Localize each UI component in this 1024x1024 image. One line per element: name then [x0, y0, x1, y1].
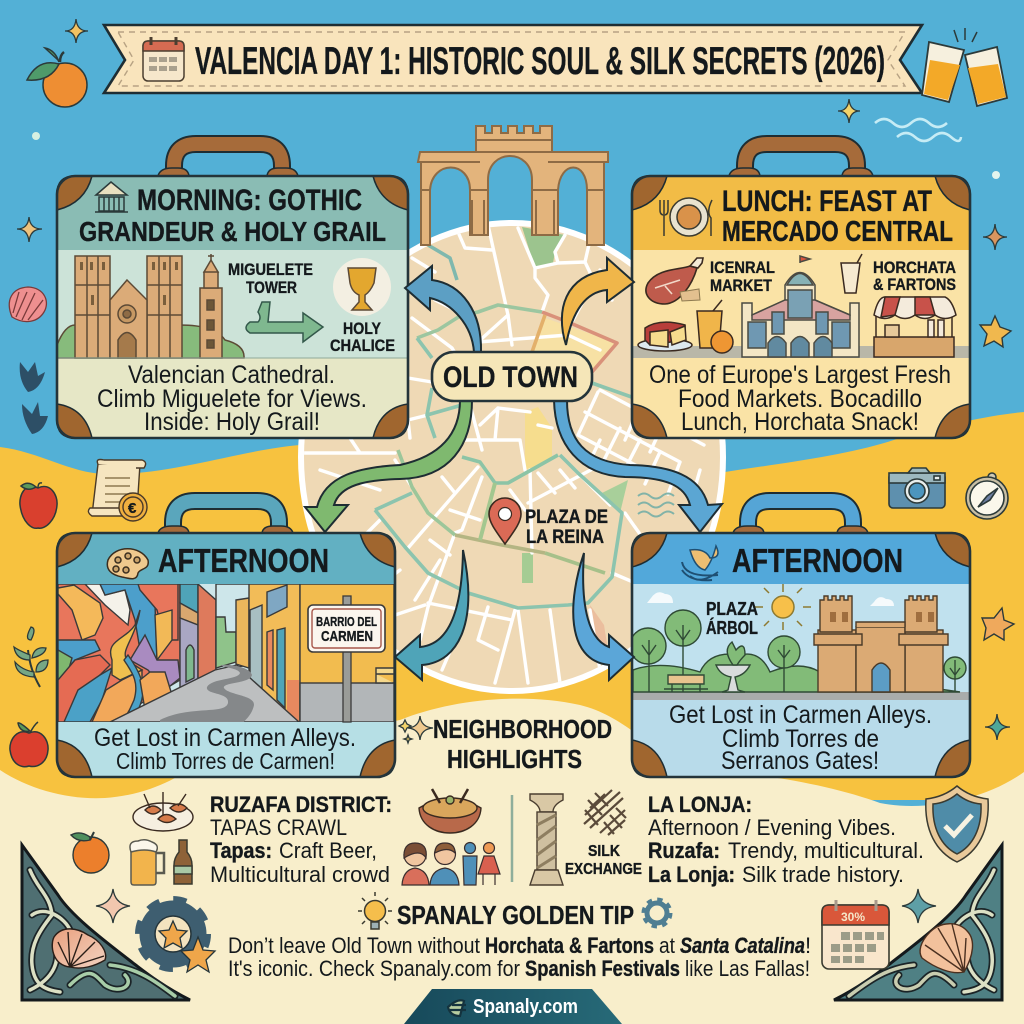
- suitcase: morning: Inside: Holy Grail!: [144, 408, 320, 436]
- arrow: to afternoon serranos: [554, 400, 722, 532]
- footer text: Spanaly.com: [473, 996, 578, 1018]
- icon: star right upper: [980, 316, 1011, 347]
- la lonja block: [530, 790, 924, 887]
- label: plaza de la reina: PLAZA DE: [525, 507, 608, 528]
- corners: [57, 176, 408, 438]
- road sign: barrio del carmen: [308, 596, 385, 722]
- heading: morning: MORNING: GOTHIC: [137, 184, 362, 217]
- arrow: to morning: [405, 266, 481, 352]
- old town pill: OLD TOWN: [443, 361, 578, 394]
- ruzafa block: Tapas:: [210, 838, 272, 863]
- background: sand band: [0, 412, 1024, 800]
- corners: [632, 533, 970, 777]
- neighborhood highlights heading: HIGHLIGHTS: [447, 744, 582, 774]
- label: holy chalice: HOLY: [343, 319, 382, 338]
- ruzafa block: [130, 789, 500, 887]
- suitcase: afternoon carmen: [57, 501, 395, 777]
- suitcase: afternoon serranos: Climb Torres de: [722, 725, 879, 753]
- corners: [632, 176, 970, 438]
- icon: holy chalice: [333, 258, 391, 316]
- icon: gear with star: [139, 900, 215, 972]
- suitcase: afternoon serranos: Serranos Gates!: [721, 747, 879, 775]
- ruzafa block: TAPAS CRAWL: [210, 815, 347, 840]
- la lonja block: Silk trade history.: [742, 862, 904, 887]
- icon: waves: [875, 119, 961, 141]
- icon: stew bowl: [419, 789, 481, 833]
- footer badge: [404, 989, 622, 1024]
- tip text line 2: like Las Fallas!: [685, 956, 810, 981]
- icon: scroll and euro coin: [88, 460, 147, 521]
- arrow: curved to serranos side: [573, 553, 634, 680]
- icon: beer bottle: [174, 840, 192, 884]
- road sign: barrio del carmen: BARRIO DEL: [316, 615, 377, 629]
- suitcase: afternoon serranos: ÁRBOL: [706, 617, 758, 638]
- suitcase: morning: CHALICE: [330, 336, 395, 355]
- icon: calendar: [143, 37, 184, 81]
- map of old town: [295, 220, 726, 694]
- title banner: [104, 25, 922, 93]
- icon: silk weave: [584, 790, 626, 835]
- label: horchata and fartons: HORCHATA: [873, 258, 956, 277]
- icon: scallop shell left: [9, 287, 46, 322]
- arrow: to lunch: [562, 258, 634, 345]
- shell: [920, 924, 973, 973]
- tip text line 2: Spanish Festivals: [525, 956, 680, 981]
- divider: [511, 795, 513, 882]
- illustration: market stall: [874, 297, 956, 357]
- suitcase: afternoon serranos: [630, 501, 970, 777]
- suitcase: lunch: & FARTONS: [873, 275, 956, 294]
- icon: sun: [755, 584, 811, 630]
- text: ruzafa: RUZAFA DISTRICT:: [210, 792, 392, 817]
- illustration: juice and orange: [697, 300, 733, 353]
- label: miguelete tower: MIGUELETE: [228, 260, 313, 279]
- label: plaza de la reina: LA REINA: [526, 527, 604, 548]
- illustration: cathedral: [57, 254, 244, 358]
- suitcase: morning: Climb Miguelete for Views.: [97, 385, 367, 413]
- body text: afternoon serranos: Get Lost in Carmen Alleys.: [669, 701, 932, 729]
- icon: orange lower: [71, 832, 109, 873]
- heading: afternoon serranos: AFTERNOON: [732, 542, 903, 579]
- icon: compass: [966, 473, 1008, 519]
- neighborhood highlights heading: NEIGHBORHOOD: [433, 714, 612, 744]
- old town pill: [432, 352, 592, 401]
- la lonja block: Ruzafa:: [648, 838, 720, 863]
- neighborhood highlights heading: [433, 714, 612, 774]
- tip text line 1: Don’t leave Old Town without: [228, 933, 480, 958]
- tip heading: SPANALY GOLDEN TIP: [397, 900, 634, 930]
- icon: plate with fork and knife: [660, 198, 712, 236]
- suitcase: lunch: MERCADO CENTRAL: [722, 216, 953, 248]
- suitcase: lunch: Lunch, Horchata Snack!: [681, 408, 919, 436]
- roman gate towers landmark: [418, 126, 608, 245]
- handle: [745, 144, 857, 176]
- icon: tapas plate: [133, 792, 193, 831]
- corners: [57, 533, 395, 777]
- icon: footprints: [20, 362, 48, 434]
- road sign: barrio del carmen: CARMEN: [321, 628, 373, 645]
- icon: climb arrow: [246, 302, 323, 342]
- tip text line 1: at: [659, 933, 675, 958]
- map: parks: [522, 227, 565, 268]
- icon: clinking beers: [922, 28, 1007, 106]
- icon: small gear: [644, 900, 670, 926]
- tip text line 1: !: [805, 933, 811, 958]
- icon: apple lower: [10, 722, 48, 767]
- illustration: market building: [742, 256, 859, 357]
- suitcase: afternoon carmen: Climb Torres de Carmen!: [116, 748, 335, 774]
- map: white streets: [295, 225, 704, 683]
- heading: afternoon carmen: AFTERNOON: [158, 542, 329, 579]
- label: silk exchange: SILK: [588, 843, 621, 860]
- icon: calendar bottom right: [822, 900, 889, 969]
- icon: scroll and euro coin: €: [128, 500, 137, 517]
- icon: herb sprig: [14, 627, 48, 687]
- map: river waves: [638, 494, 674, 516]
- tip text line 2: It's iconic. Check Spanaly.com for: [228, 956, 520, 981]
- la lonja block: Afternoon / Evening Vibes.: [648, 815, 896, 840]
- background: cream lower area: [0, 699, 1024, 1024]
- icon: orange top left: [27, 48, 87, 107]
- golden tip section: [228, 892, 811, 981]
- text: la lonja: LA LONJA:: [648, 792, 752, 817]
- body text: lunch: One of Europe's Largest Fresh: [649, 361, 951, 389]
- suitcase: lunch: Food Markets. Bocadillo: [678, 385, 922, 413]
- icon: light bulb: [358, 892, 392, 929]
- suitcase: lunch: [632, 144, 970, 438]
- illustration: ham: [646, 258, 703, 304]
- corner ornament: left: [22, 845, 190, 1000]
- icon: camera: [889, 468, 945, 508]
- map: central cream district: [525, 407, 552, 470]
- icon: shield: [926, 786, 988, 862]
- la lonja block: La Lonja:: [648, 862, 735, 887]
- illustration: carmen alley with mural: [58, 584, 394, 722]
- tip text line 1: [228, 933, 811, 958]
- ruzafa block: Multicultural crowd: [210, 862, 390, 887]
- label: central market: ICENRAL: [710, 258, 775, 277]
- icon: footer logo: [448, 1000, 466, 1016]
- suitcase: morning: TOWER: [246, 278, 297, 297]
- map: coloured route lines: [375, 245, 640, 608]
- icon: bird and waves: [682, 546, 718, 580]
- handle: [174, 144, 282, 176]
- icon: people group: [402, 842, 500, 885]
- icon: beer mug: [130, 840, 164, 885]
- shell: [52, 929, 106, 968]
- body text: morning: Valencian Cathedral.: [128, 361, 335, 389]
- corner ornament: right: [834, 845, 1002, 1000]
- tip text line 1: Horchata & Fartons: [485, 933, 654, 958]
- icon: star right lower: [982, 608, 1014, 640]
- handle: [173, 501, 279, 533]
- tip text line 1: Santa Catalina: [680, 933, 805, 958]
- label: plaza arbol: PLAZA: [706, 599, 758, 619]
- map pin: [489, 498, 521, 544]
- suitcase: lunch: MARKET: [710, 276, 773, 295]
- tip text line 2: [228, 956, 810, 981]
- suitcase: morning: GRANDEUR & HOLY GRAIL: [79, 216, 386, 247]
- icon: drink glass: [841, 254, 862, 293]
- icon: palette: [107, 549, 148, 579]
- body text: afternoon carmen: Get Lost in Carmen Alleys.: [94, 724, 356, 752]
- icon: apple upper: [20, 483, 57, 528]
- arrow: to afternoon carmen: [305, 400, 472, 532]
- ruzafa block: Craft Beer,: [279, 838, 377, 863]
- suitcase: morning: [57, 144, 408, 438]
- icon: twisted column: [530, 794, 563, 885]
- la lonja block: EXCHANGE: [565, 861, 642, 878]
- la lonja block: Trendy, multicultural.: [728, 838, 924, 863]
- arrow: curved to carmen side: [395, 550, 468, 680]
- illustration: cheese: [638, 322, 692, 351]
- heading: lunch: LUNCH: FEAST AT: [722, 185, 932, 218]
- icon: temple: [95, 182, 128, 212]
- label: plaza de la reina: [525, 507, 608, 548]
- icon: calendar bottom right: 30%: [841, 910, 865, 924]
- illustration: park and serranos towers: [630, 584, 969, 700]
- handle: [748, 501, 853, 533]
